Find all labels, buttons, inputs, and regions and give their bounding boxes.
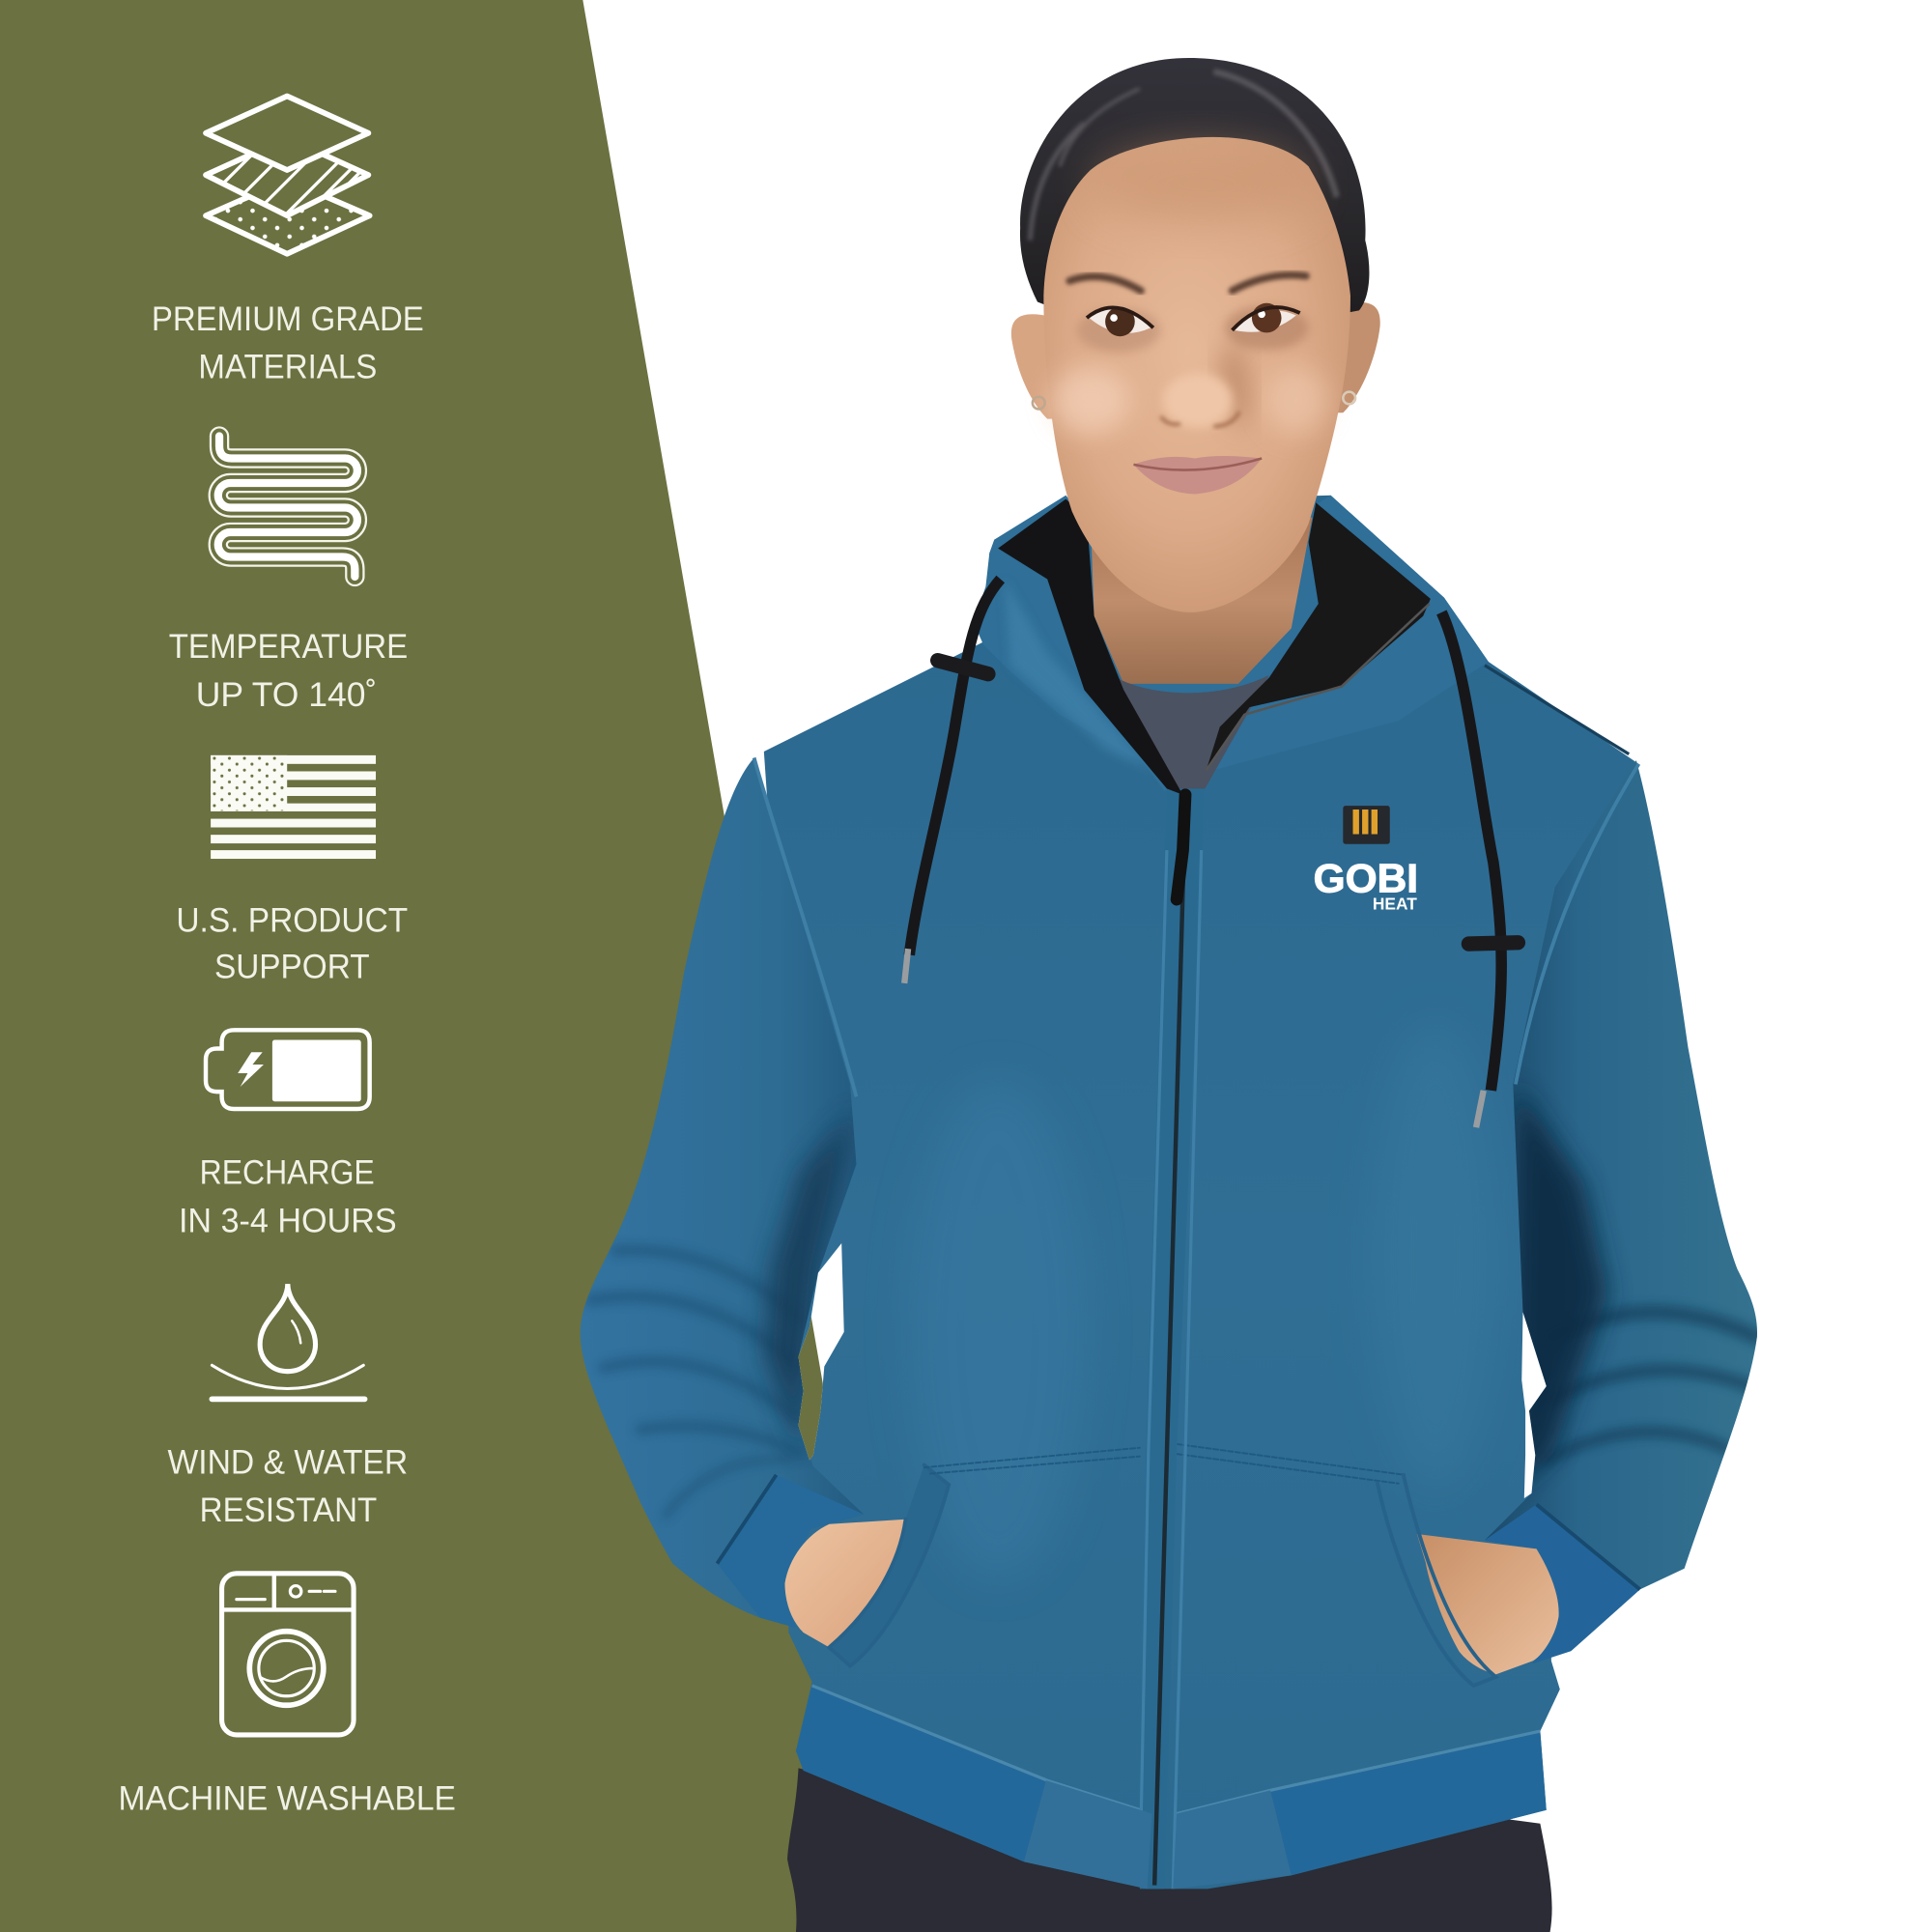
cheek highlight left bbox=[1051, 366, 1130, 435]
icon: stacked material layers bbox=[206, 96, 376, 254]
eye socket shade right bbox=[1225, 305, 1309, 350]
feature: machine washable bbox=[118, 1574, 456, 1818]
icon: charging battery bbox=[206, 1030, 370, 1109]
feature: premium grade materials bbox=[152, 96, 424, 386]
icon: heating coil bbox=[218, 437, 357, 577]
torso bbox=[764, 496, 1638, 1889]
feature: recharge in 3-4 hours bbox=[179, 1030, 397, 1240]
right toggle bbox=[1468, 943, 1518, 944]
neck bbox=[1091, 518, 1312, 684]
zipper line bbox=[1154, 801, 1185, 1886]
ear right bbox=[1306, 302, 1380, 412]
icon: water drop on surface bbox=[212, 1284, 365, 1399]
nostrils bbox=[1161, 412, 1239, 426]
label: premium grade materials bbox=[152, 300, 424, 386]
lips bbox=[1133, 456, 1262, 494]
ribbed hem right bbox=[1270, 1731, 1547, 1875]
brand logo: HEAT bbox=[1373, 894, 1417, 913]
shoulder seams bbox=[754, 666, 1638, 1096]
feature list bbox=[118, 96, 456, 1818]
left toggle bbox=[938, 661, 988, 674]
label: wind and water resistant: RESISTANT bbox=[200, 1492, 377, 1529]
eyebrow left bbox=[1069, 276, 1141, 291]
label: temperature up to 140 degrees bbox=[169, 628, 408, 714]
arm: viewer right bbox=[1485, 760, 1757, 1663]
eye left bbox=[1087, 307, 1153, 336]
hair sheen bbox=[1030, 71, 1337, 241]
photo: woman wearing blue heated hoodie bbox=[581, 58, 1757, 1932]
hand right in pocket bbox=[1417, 1534, 1559, 1674]
ribbed cuff left bbox=[717, 1475, 864, 1628]
leggings bbox=[787, 1768, 1552, 1932]
face bbox=[1043, 137, 1350, 612]
label: wind and water resistant bbox=[167, 1444, 408, 1529]
left string tip bbox=[904, 949, 908, 983]
zipper placket bbox=[1140, 788, 1205, 1889]
label: temperature up to 140 degrees: TEMPERATURE bbox=[169, 628, 408, 666]
icon: washing machine bbox=[222, 1574, 354, 1735]
brand logo: GOBI bbox=[1314, 855, 1418, 900]
pockets bbox=[829, 1444, 1495, 1686]
left arm shading bbox=[591, 1109, 856, 1516]
drawstrings bbox=[904, 579, 1518, 1127]
label: recharge in 3-4 hours: IN 3-4 HOURS bbox=[179, 1203, 397, 1240]
body highlight bbox=[912, 1084, 1084, 1577]
label: U.S. product support bbox=[176, 901, 408, 986]
hood bbox=[974, 496, 1489, 791]
lips line bbox=[1133, 458, 1262, 470]
right torso highlight bbox=[1374, 1023, 1497, 1491]
label: recharge in 3-4 hours: RECHARGE bbox=[200, 1154, 375, 1192]
right hem patch bbox=[1173, 1790, 1292, 1889]
nose shade bbox=[1220, 332, 1249, 431]
arm: viewer left bbox=[581, 757, 864, 1628]
nose bbox=[1163, 373, 1233, 428]
panel: olive features sidebar bbox=[0, 0, 918, 1932]
earring left bbox=[1033, 397, 1045, 409]
right string tip bbox=[1476, 1091, 1484, 1127]
eye right bbox=[1233, 303, 1300, 332]
hand left in pocket bbox=[784, 1520, 906, 1647]
hoodie body bbox=[581, 496, 1757, 1889]
label: U.S. product support: SUPPORT bbox=[214, 949, 370, 986]
hood lining zipper edge bbox=[1207, 604, 1430, 770]
label: premium grade materials: MATERIALS bbox=[198, 349, 377, 386]
right arm shading bbox=[1509, 1084, 1756, 1491]
hem seam bbox=[812, 1686, 1540, 1814]
hood lining left bbox=[998, 499, 1182, 795]
ribbed cuff right bbox=[1485, 1504, 1640, 1663]
hood highlight bbox=[1005, 579, 1152, 770]
hood lining right bbox=[1207, 502, 1431, 770]
cheek highlight right bbox=[1264, 366, 1328, 435]
feature: wind and water resistant bbox=[167, 1284, 408, 1529]
ribbed hem left bbox=[796, 1686, 1046, 1861]
ear left bbox=[1011, 314, 1084, 419]
feature: U.S. product support bbox=[176, 755, 408, 986]
label: temperature up to 140 degrees: UP TO 140˚ bbox=[196, 676, 377, 714]
head bbox=[1011, 58, 1380, 612]
right drawstring bbox=[1441, 612, 1501, 1091]
hair bbox=[1020, 58, 1369, 321]
label: U.S. product support: U.S. PRODUCT bbox=[176, 901, 408, 939]
t-shirt collar bbox=[1106, 671, 1269, 788]
heat control button bbox=[1343, 806, 1390, 844]
left drawstring bbox=[909, 579, 1001, 955]
eye socket shade bbox=[1077, 308, 1161, 353]
label: machine washable: MACHINE WASHABLE bbox=[118, 1780, 456, 1818]
cuff seams bbox=[717, 1475, 1640, 1589]
forehead shade bbox=[1096, 148, 1306, 222]
feature: temperature up to 140 bbox=[169, 437, 408, 714]
label: wind and water resistant: WIND & WATER bbox=[167, 1444, 408, 1482]
icon: American flag bbox=[211, 755, 376, 859]
label: recharge in 3-4 hours bbox=[179, 1154, 397, 1240]
earring right bbox=[1343, 392, 1355, 404]
center bottom hem patches bbox=[1024, 1780, 1152, 1889]
placket edges bbox=[1140, 850, 1202, 1889]
gap between arm and body bbox=[799, 1243, 1547, 1498]
zipper pull bbox=[1177, 795, 1185, 899]
label: premium grade materials: PREMIUM GRADE bbox=[152, 300, 424, 338]
eyebrow right bbox=[1233, 275, 1306, 291]
